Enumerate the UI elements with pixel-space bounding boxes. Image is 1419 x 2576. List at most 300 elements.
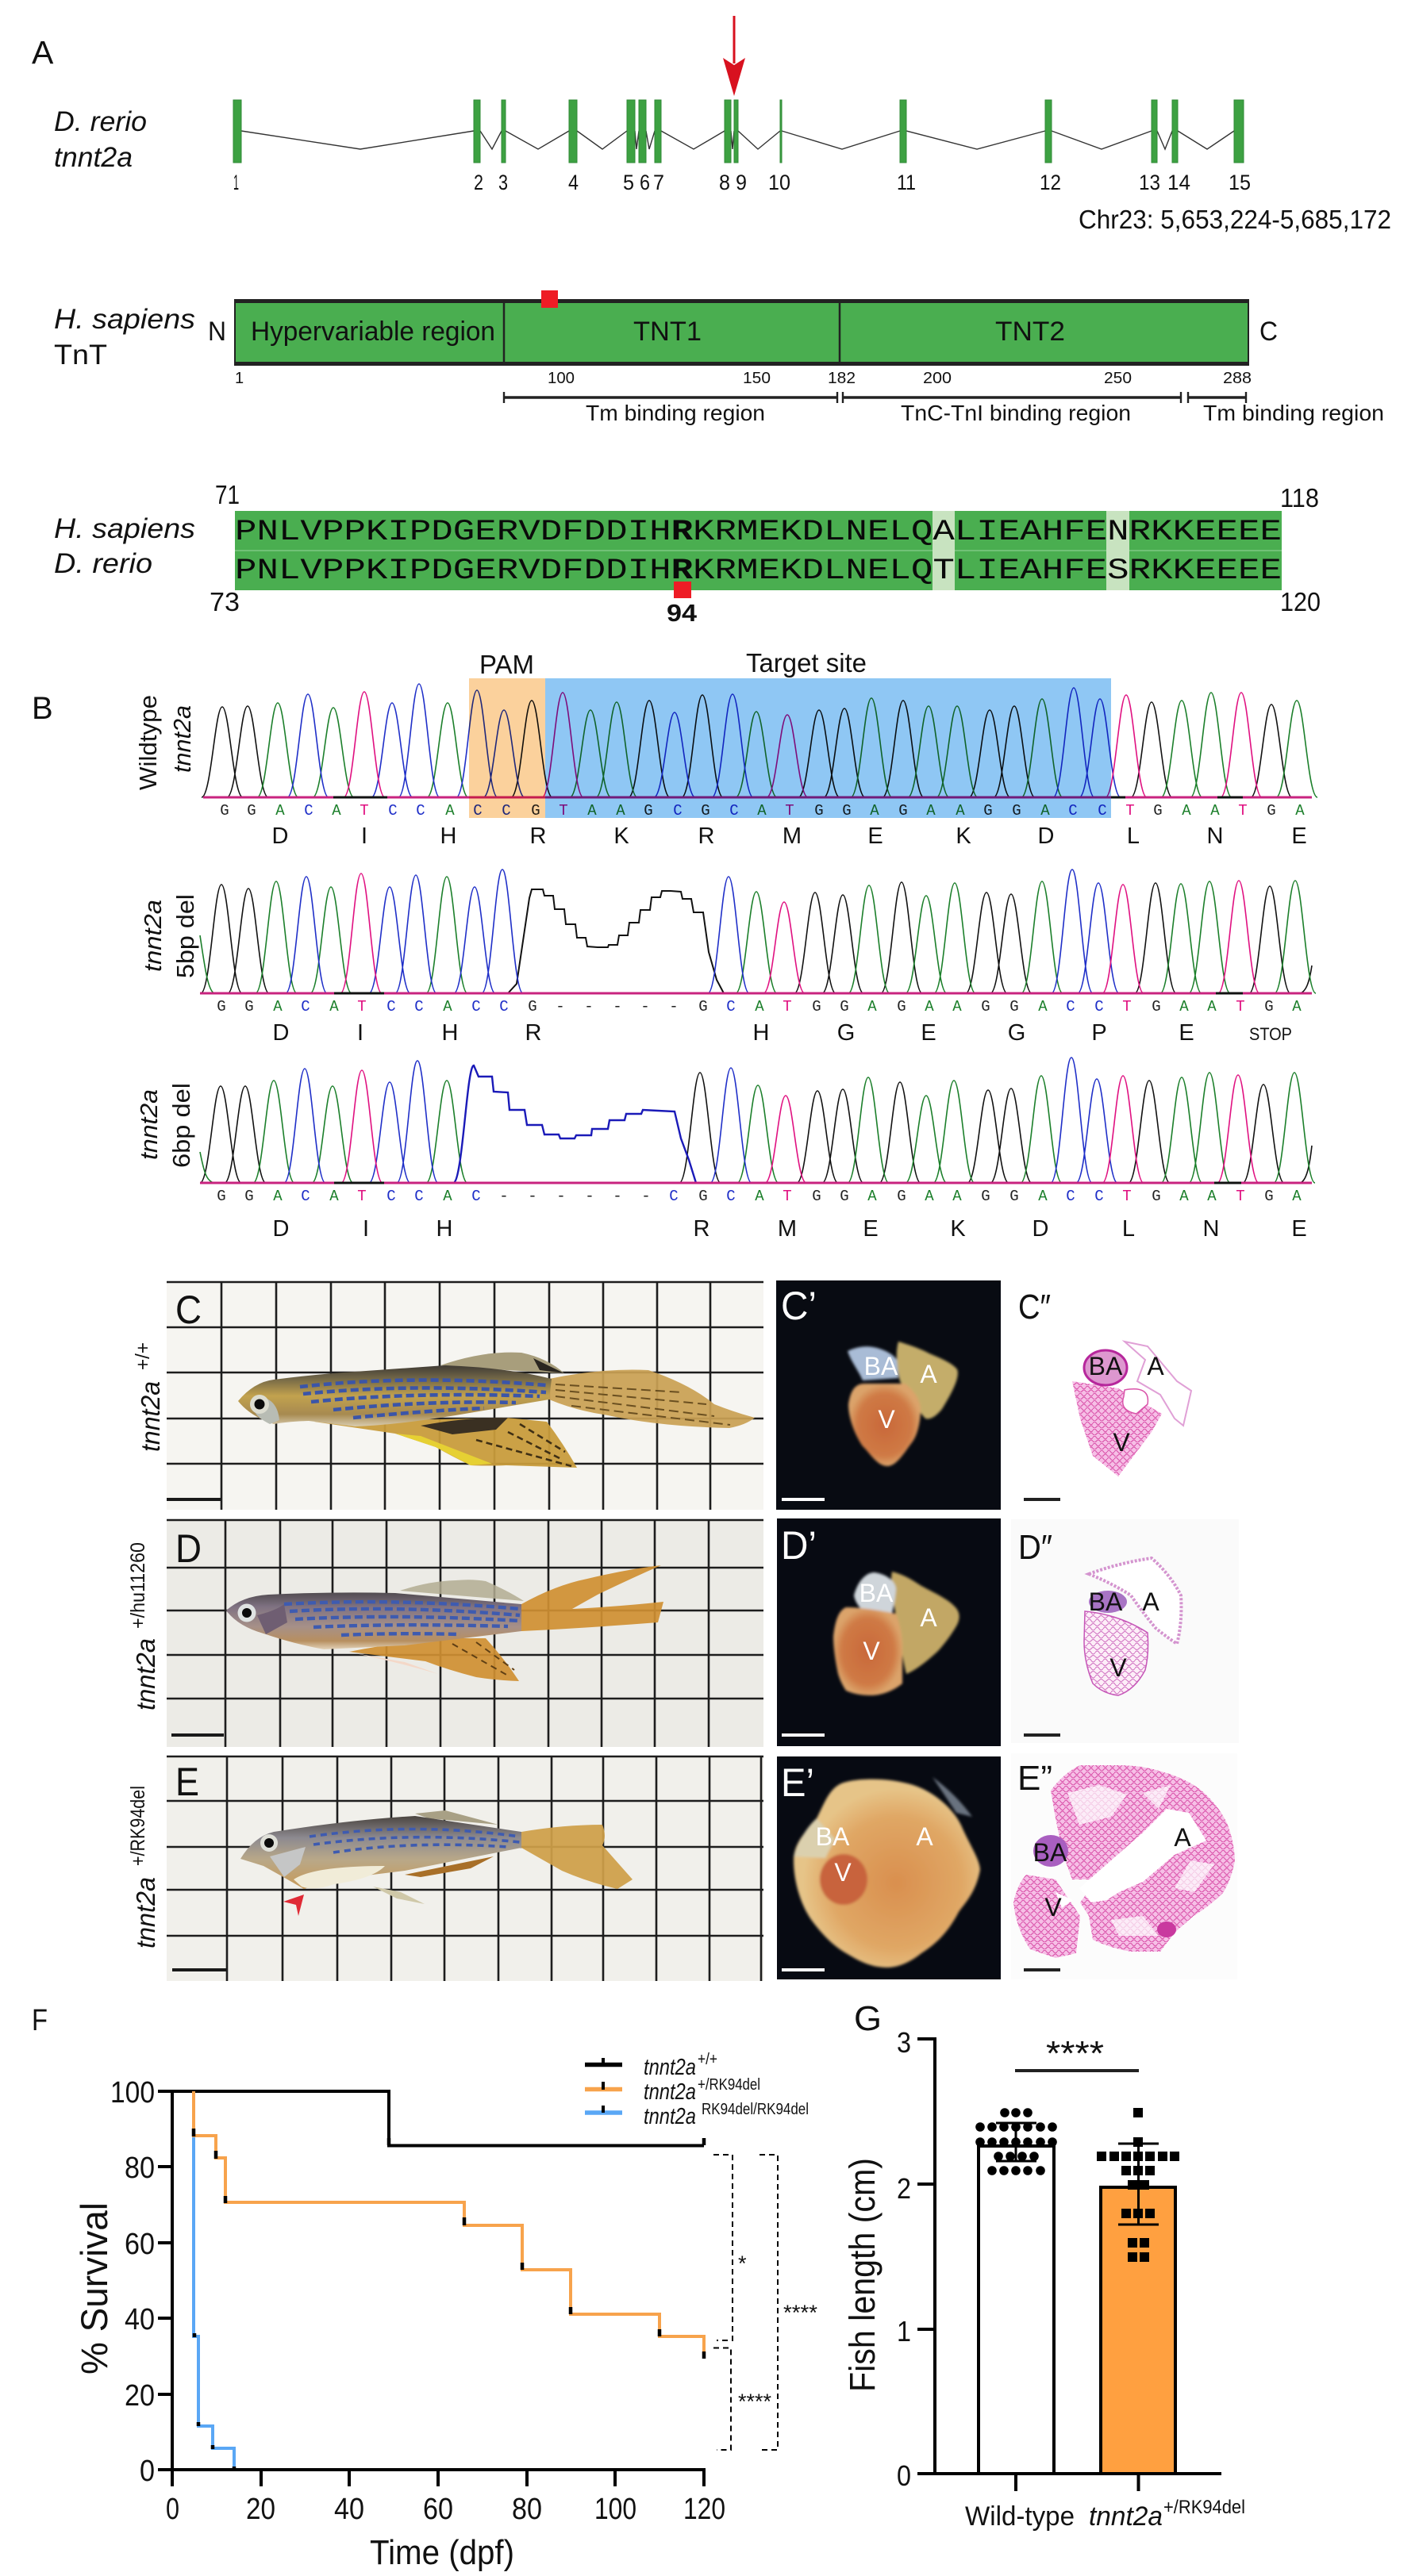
6bp base calls: A <box>1292 1188 1302 1205</box>
wildtype base calls: T <box>785 802 794 820</box>
6bp base calls: G <box>1009 1188 1019 1205</box>
significance stars <box>738 2252 818 2413</box>
6bp base calls: A <box>1038 1188 1048 1205</box>
grid paper lines <box>167 1756 763 1981</box>
5bp amino acids: STOP <box>1249 1024 1292 1044</box>
5bp base calls: G <box>897 998 906 1015</box>
residue numbers: 288 <box>1223 370 1252 387</box>
scale bar <box>782 1498 825 1501</box>
residue numbers: 182 <box>828 370 856 387</box>
5bp base calls: - <box>613 998 622 1015</box>
5bp base calls: G <box>698 998 708 1015</box>
y axis numbers: 40 <box>125 2303 155 2336</box>
exon numbers: 11 <box>897 171 916 194</box>
6bp base calls: G <box>698 1188 708 1205</box>
6bp amino acids: R <box>694 1216 710 1242</box>
y axis numbers: 0 <box>897 2459 911 2492</box>
wildtype base calls: C <box>502 802 511 820</box>
target site highlight <box>545 678 1111 818</box>
red mutation marker on protein <box>541 290 558 308</box>
wildtype base calls: A <box>616 802 625 820</box>
chamber labels <box>1089 1587 1159 1682</box>
bar: tnnt2a heterozygous <box>1101 2187 1175 2474</box>
6bp base calls: C <box>301 1188 310 1205</box>
wildtype base calls: A <box>587 802 597 820</box>
chamber labels <box>1033 1823 1191 1921</box>
wildtype row label <box>134 695 196 790</box>
human sequence: PNLVPPKIPDGERVDFDDIH RKRMEKDLNELQALIEAHFENRKKEEEE <box>235 516 1282 549</box>
5bp base calls: A <box>1207 998 1217 1015</box>
binding region labels <box>586 401 1384 425</box>
residue 94 marker: 94 <box>667 599 698 627</box>
6bp amino acids: L <box>1122 1216 1135 1242</box>
panel letter C: C <box>175 1288 202 1332</box>
6bp base calls: A <box>1207 1188 1217 1205</box>
chamber labels: V <box>1044 1893 1062 1921</box>
5bp base calls: G <box>1152 998 1161 1015</box>
legend <box>585 2051 809 2129</box>
chamber labels: A <box>920 1603 937 1632</box>
wildtype amino acids: E <box>867 823 883 849</box>
5bp del row label: tnnt2a <box>139 900 167 972</box>
panel C prime: wild-type heart <box>776 1280 1001 1510</box>
5bp base calls: T <box>1122 998 1132 1015</box>
chamber labels: BA <box>864 1352 898 1380</box>
panel letter D'': D″ <box>1018 1528 1052 1567</box>
5bp base calls: A <box>867 998 877 1015</box>
exon numbers: 5 <box>623 171 634 194</box>
scale bar <box>1024 1498 1060 1501</box>
scale bar <box>172 1968 226 1971</box>
wildtype base calls: G <box>842 802 852 820</box>
alignment numbers <box>210 480 1321 616</box>
species label H. sapiens TnT <box>54 304 195 370</box>
x axis numbers: 100 <box>594 2493 636 2526</box>
heterozygous error bar <box>1118 2144 1159 2225</box>
binding region brackets <box>504 396 1246 399</box>
6bp base calls: G <box>812 1188 821 1205</box>
y axis numbers: 80 <box>125 2152 155 2185</box>
genotype label +/hu11260: +/hu11260 <box>127 1542 149 1629</box>
histology section <box>1084 1558 1181 1695</box>
5bp base calls: A <box>1179 998 1189 1015</box>
panel F: Kaplan-Meier survival chart <box>32 2004 818 2572</box>
6bp base calls: A <box>952 1188 962 1205</box>
genotype label +/RK94del: tnnt2a <box>131 1877 160 1948</box>
chromosome coordinates: Chr23: 5,653,224-5,685,172 <box>1079 205 1391 234</box>
censor ticks <box>194 2129 704 2470</box>
species label D. rerio tnnt2a: tnnt2a <box>54 142 133 173</box>
exon numbers: 3 <box>498 171 508 194</box>
5bp base calls: T <box>1236 998 1245 1015</box>
wildtype amino acids: E <box>1291 823 1307 849</box>
alignment numbers: 71 <box>215 480 240 509</box>
scale bar <box>782 1733 825 1737</box>
chamber labels: V <box>863 1637 880 1665</box>
x axis numbers <box>166 2493 725 2526</box>
5bp base calls: - <box>669 998 679 1015</box>
6bp del row label <box>135 1083 195 1168</box>
wildtype base calls: G <box>247 802 256 820</box>
wildtype base calls: A <box>1182 802 1191 820</box>
y axis numbers <box>897 2026 911 2492</box>
axes <box>917 2037 1221 2491</box>
y axis title: % Survival <box>73 2202 115 2374</box>
wildtype base calls: A <box>445 802 455 820</box>
alignment species labels: D. rerio <box>54 548 152 579</box>
panel letter C'': C″ <box>1018 1288 1051 1326</box>
histology section <box>1072 1342 1191 1476</box>
alignment numbers: 118 <box>1280 483 1319 513</box>
wildtype base calls: A <box>926 802 936 820</box>
panel letter E'': E” <box>1017 1759 1052 1798</box>
chamber labels: A <box>1142 1587 1159 1616</box>
5bp base calls: A <box>273 998 283 1015</box>
exon numbers: 15 <box>1229 171 1251 194</box>
x axis title: Time (dpf) <box>370 2533 514 2572</box>
5bp amino acids: R <box>525 1020 541 1046</box>
panel letter E: E <box>175 1760 199 1804</box>
domain names: TNT1 <box>633 317 702 347</box>
5bp baseline <box>200 992 1312 995</box>
y axis numbers: 100 <box>110 2076 155 2110</box>
wildtype base calls: G <box>1153 802 1163 820</box>
exon numbers: 12 <box>1040 171 1061 194</box>
wildtype base calls: G <box>644 802 653 820</box>
survival curve: heterozygous <box>194 2091 704 2358</box>
exon numbers: 8 <box>719 171 730 194</box>
6bp base calls: G <box>897 1188 906 1205</box>
6bp base calls: A <box>925 1188 934 1205</box>
panel E: RK94del fish photo <box>127 1756 763 1981</box>
6bp base calls: G <box>1264 1188 1274 1205</box>
exon numbers <box>233 171 1251 194</box>
species label H. sapiens TnT: TnT <box>54 340 107 370</box>
wildtype base calls: G <box>701 802 710 820</box>
species label H. sapiens TnT: H. sapiens <box>54 304 195 335</box>
wildtype base calls: T <box>1238 802 1248 820</box>
wildtype amino acids: D <box>272 823 288 849</box>
wildtype amino acids: I <box>361 823 367 849</box>
wildtype base calls: A <box>1040 802 1050 820</box>
genotype label +/RK94del <box>127 1786 160 1948</box>
wildtype base calls: C <box>304 802 313 820</box>
panel D: hu11260 fish photo <box>127 1519 763 1747</box>
scale bar <box>1024 1968 1060 1971</box>
residue numbers: 1 <box>235 370 244 387</box>
enlarged heart <box>794 1777 980 1968</box>
histology section: enlarged atrium and ventricle <box>1013 1765 1235 1958</box>
panel E prime: RK94del heart <box>777 1756 1001 1979</box>
zebrafish sequence: PNLVPPKIPDGERVDFDDIH RKRMEKDLNELQTLIEAHFESRKKEEEE <box>235 555 1282 588</box>
5bp base calls: A <box>755 998 764 1015</box>
residue numbers: 100 <box>548 370 575 387</box>
5bp amino acids: I <box>357 1020 363 1046</box>
exon numbers: 9 <box>736 171 747 194</box>
5bp base calls: - <box>556 998 565 1015</box>
panel letter D': D’ <box>781 1523 817 1568</box>
5bp base calls: G <box>244 998 254 1015</box>
wildtype base calls: A <box>275 802 285 820</box>
chamber labels: A <box>1147 1352 1164 1380</box>
legend: tnnt2a <box>644 2104 696 2129</box>
wildtype amino acids: R <box>530 823 546 849</box>
genotype label +/hu11260: tnnt2a <box>131 1638 160 1710</box>
chamber labels <box>859 1579 937 1665</box>
6bp del row label: tnnt2a <box>135 1089 163 1160</box>
x axis numbers: 80 <box>512 2493 542 2526</box>
N and C termini: C <box>1259 317 1278 347</box>
5bp base calls: G <box>528 998 537 1015</box>
panel letter B: B <box>32 691 53 726</box>
5bp base calls: C <box>414 998 424 1015</box>
red arrow marking exon target <box>723 16 745 96</box>
heterozygous data points <box>1097 2108 1179 2262</box>
panel B: sequencing chromatograms <box>32 648 1317 1242</box>
wildtype base calls: G <box>531 802 540 820</box>
fish: RK94del with swollen abdomen <box>240 1810 633 1904</box>
y axis numbers: 1 <box>897 2315 911 2348</box>
wildtype base calls: G <box>898 802 908 820</box>
wildtype row label: Wildtype <box>134 695 162 790</box>
legend: tnnt2a <box>644 2055 696 2080</box>
PAM and target site labels: PAM <box>479 650 534 679</box>
alignment species labels <box>54 513 195 579</box>
6bp base calls: G <box>244 1188 254 1205</box>
6bp base calls: - <box>641 1188 651 1205</box>
legend: +/+ <box>698 2051 717 2068</box>
y axis numbers <box>110 2076 155 2488</box>
PAM highlight <box>469 678 545 818</box>
panel letter E': E’ <box>781 1760 814 1805</box>
x axis numbers: 60 <box>423 2493 453 2526</box>
domain names <box>251 317 1065 347</box>
wildtype base calls: G <box>220 802 229 820</box>
5bp base calls: - <box>640 998 650 1015</box>
residue numbers: 150 <box>743 370 771 387</box>
domain names: Hypervariable region <box>251 317 495 347</box>
significance line and stars: **** <box>1046 2034 1104 2073</box>
6bp base calls: A <box>755 1188 764 1205</box>
5bp base calls: G <box>840 998 849 1015</box>
6bp amino acids <box>273 1216 1307 1242</box>
5bp base calls: G <box>1009 998 1019 1015</box>
wildtype base calls: G <box>814 802 824 820</box>
panel A: gene and protein schematic <box>32 16 1391 627</box>
chamber labels: BA <box>1089 1587 1123 1616</box>
x axis numbers: 40 <box>334 2493 364 2526</box>
chamber labels <box>864 1352 937 1434</box>
y axis numbers: 20 <box>125 2379 155 2413</box>
residue numbers: 250 <box>1104 370 1132 387</box>
wildtype base calls: A <box>757 802 767 820</box>
wildtype amino acids: M <box>783 823 802 849</box>
6bp del row label: 6bp del <box>167 1083 195 1168</box>
5bp amino acids: H <box>442 1020 458 1046</box>
chamber labels: V <box>878 1405 895 1434</box>
wildtype amino acids: K <box>613 823 629 849</box>
wildtype base calls: A <box>332 802 341 820</box>
PAM and target site labels <box>479 648 867 679</box>
x axis labels: tnnt2a <box>1089 2501 1163 2532</box>
wildtype row label: tnnt2a <box>168 705 196 773</box>
wildtype base calls: C <box>416 802 425 820</box>
6bp base calls: T <box>783 1188 792 1205</box>
6bp base calls: - <box>499 1188 509 1205</box>
5bp base calls: G <box>217 998 226 1015</box>
wildtype base calls: C <box>388 802 398 820</box>
wildtype base calls: T <box>360 802 369 820</box>
sequence alignment <box>235 511 1282 590</box>
y axis numbers: 2 <box>897 2172 911 2205</box>
pale background <box>1011 1519 1239 1743</box>
scale bar <box>167 1498 221 1501</box>
dark background <box>777 1518 1001 1746</box>
chamber labels: V <box>1109 1653 1127 1682</box>
legend: +/RK94del <box>698 2076 760 2094</box>
wildtype base calls: A <box>956 802 965 820</box>
6bp base calls: - <box>585 1188 594 1205</box>
wildtype amino acids: N <box>1207 823 1223 849</box>
6bp base calls: G <box>1152 1188 1161 1205</box>
x axis numbers: 20 <box>246 2493 275 2526</box>
5bp base calls: C <box>1066 998 1075 1015</box>
photo background <box>167 1756 763 1981</box>
y axis numbers: 0 <box>140 2455 155 2488</box>
axes <box>158 2090 706 2486</box>
x axis numbers: 120 <box>683 2493 725 2526</box>
5bp base calls: C <box>471 998 481 1015</box>
6bp base calls: C <box>726 1188 736 1205</box>
wildtype amino acids: H <box>440 823 456 849</box>
bar: wild-type <box>979 2146 1054 2474</box>
5bp amino acids: E <box>921 1020 936 1046</box>
wildtype base calls: C <box>673 802 683 820</box>
wildtype base calls: A <box>1295 802 1305 820</box>
wildtype amino acids: L <box>1127 823 1140 849</box>
scale bar <box>171 1733 224 1737</box>
chamber labels: V <box>834 1858 852 1887</box>
fish: wild type <box>238 1353 755 1468</box>
exon numbers: 13 <box>1139 171 1160 194</box>
wildtype amino acids <box>272 823 1307 849</box>
chamber labels <box>1089 1352 1164 1457</box>
significance brackets <box>713 2155 778 2450</box>
5bp amino acids: G <box>837 1020 855 1046</box>
binding region labels: Tm binding region <box>586 401 765 425</box>
6bp base calls: C <box>414 1188 424 1205</box>
genotype label +/RK94del: +/RK94del <box>127 1786 149 1866</box>
6bp deletion chromatogram trace <box>200 1058 1315 1205</box>
6bp base calls: G <box>217 1188 226 1205</box>
5bp deletion chromatogram trace <box>200 870 1316 1015</box>
exon numbers: 10 <box>768 171 790 194</box>
6bp base calls: - <box>556 1188 566 1205</box>
6bp base calls: C <box>669 1188 679 1205</box>
residue numbers <box>235 370 1252 387</box>
6bp amino acids: I <box>363 1216 369 1242</box>
scale bar <box>1024 1733 1060 1737</box>
6bp base calls: A <box>443 1188 452 1205</box>
5bp base calls: - <box>584 998 594 1015</box>
chamber labels: BA <box>1033 1838 1067 1867</box>
legend: tnnt2a <box>644 2079 696 2105</box>
photo background <box>167 1281 763 1510</box>
residue numbers: 200 <box>923 370 952 387</box>
wildtype base calls: G <box>983 802 993 820</box>
wildtype baseline <box>203 797 1312 798</box>
wildtype base calls: G <box>1267 802 1276 820</box>
exon numbers: 7 <box>653 171 664 194</box>
6bp base calls: C <box>471 1188 481 1205</box>
chamber labels: A <box>916 1822 933 1851</box>
wildtype base calls: T <box>559 802 568 820</box>
y axis numbers: 60 <box>125 2228 155 2261</box>
6bp amino acids: N <box>1203 1216 1219 1242</box>
6bp baseline <box>200 1182 1312 1184</box>
6bp base calls: A <box>867 1188 877 1205</box>
residue 94 marker <box>667 582 698 627</box>
6bp base calls: A <box>1179 1188 1189 1205</box>
5bp amino acids: G <box>1008 1020 1025 1046</box>
5bp base calls: C <box>301 998 310 1015</box>
6bp base calls: A <box>273 1188 283 1205</box>
5bp base calls: A <box>952 998 962 1015</box>
chamber labels: BA <box>859 1579 894 1607</box>
wild-type error bar <box>996 2123 1036 2161</box>
6bp amino acids: E <box>1291 1216 1307 1242</box>
6bp base calls: G <box>840 1188 849 1205</box>
5bp base calls: A <box>443 998 452 1015</box>
5bp amino acids: D <box>273 1020 289 1046</box>
dark background <box>776 1280 1001 1510</box>
wildtype amino acids: D <box>1038 823 1054 849</box>
alignment species labels: H. sapiens <box>54 513 195 544</box>
panel C double prime: wild-type histology <box>1018 1288 1191 1501</box>
grid paper lines <box>167 1281 763 1510</box>
alignment numbers: 73 <box>210 587 240 616</box>
panel D prime: hu11260 heart <box>777 1518 1001 1746</box>
x axis labels: Wild-type <box>965 2501 1075 2532</box>
wildtype chromatogram trace <box>202 678 1317 820</box>
5bp del row label: 5bp del <box>171 894 199 978</box>
panel D double prime: hu11260 histology <box>1011 1519 1239 1743</box>
panel letter F: F <box>32 2004 48 2037</box>
6bp amino acids: K <box>950 1216 966 1242</box>
5bp del row label <box>139 894 199 978</box>
wildtype base calls: C <box>473 802 483 820</box>
chamber labels <box>816 1822 933 1887</box>
gene model: introns <box>241 131 1234 149</box>
photo background <box>167 1519 763 1747</box>
6bp base calls: T <box>1122 1188 1132 1205</box>
5bp base calls: T <box>783 998 792 1015</box>
binding region labels: Tm binding region <box>1203 401 1384 425</box>
5bp base calls: A <box>1038 998 1048 1015</box>
6bp amino acids: H <box>436 1216 452 1242</box>
6bp base calls: T <box>357 1188 367 1205</box>
significance stars: **** <box>738 2390 771 2413</box>
5bp base calls: C <box>386 998 396 1015</box>
species label D. rerio tnnt2a: D. rerio <box>54 106 147 137</box>
5bp amino acids: E <box>1179 1020 1194 1046</box>
grid paper lines <box>167 1519 763 1747</box>
N and C termini <box>208 317 1278 347</box>
significance stars: **** <box>783 2301 818 2325</box>
scale bar <box>782 1968 825 1971</box>
x axis numbers: 0 <box>166 2493 179 2526</box>
heart: atrium, bulbus, ventricle <box>833 1572 959 1695</box>
